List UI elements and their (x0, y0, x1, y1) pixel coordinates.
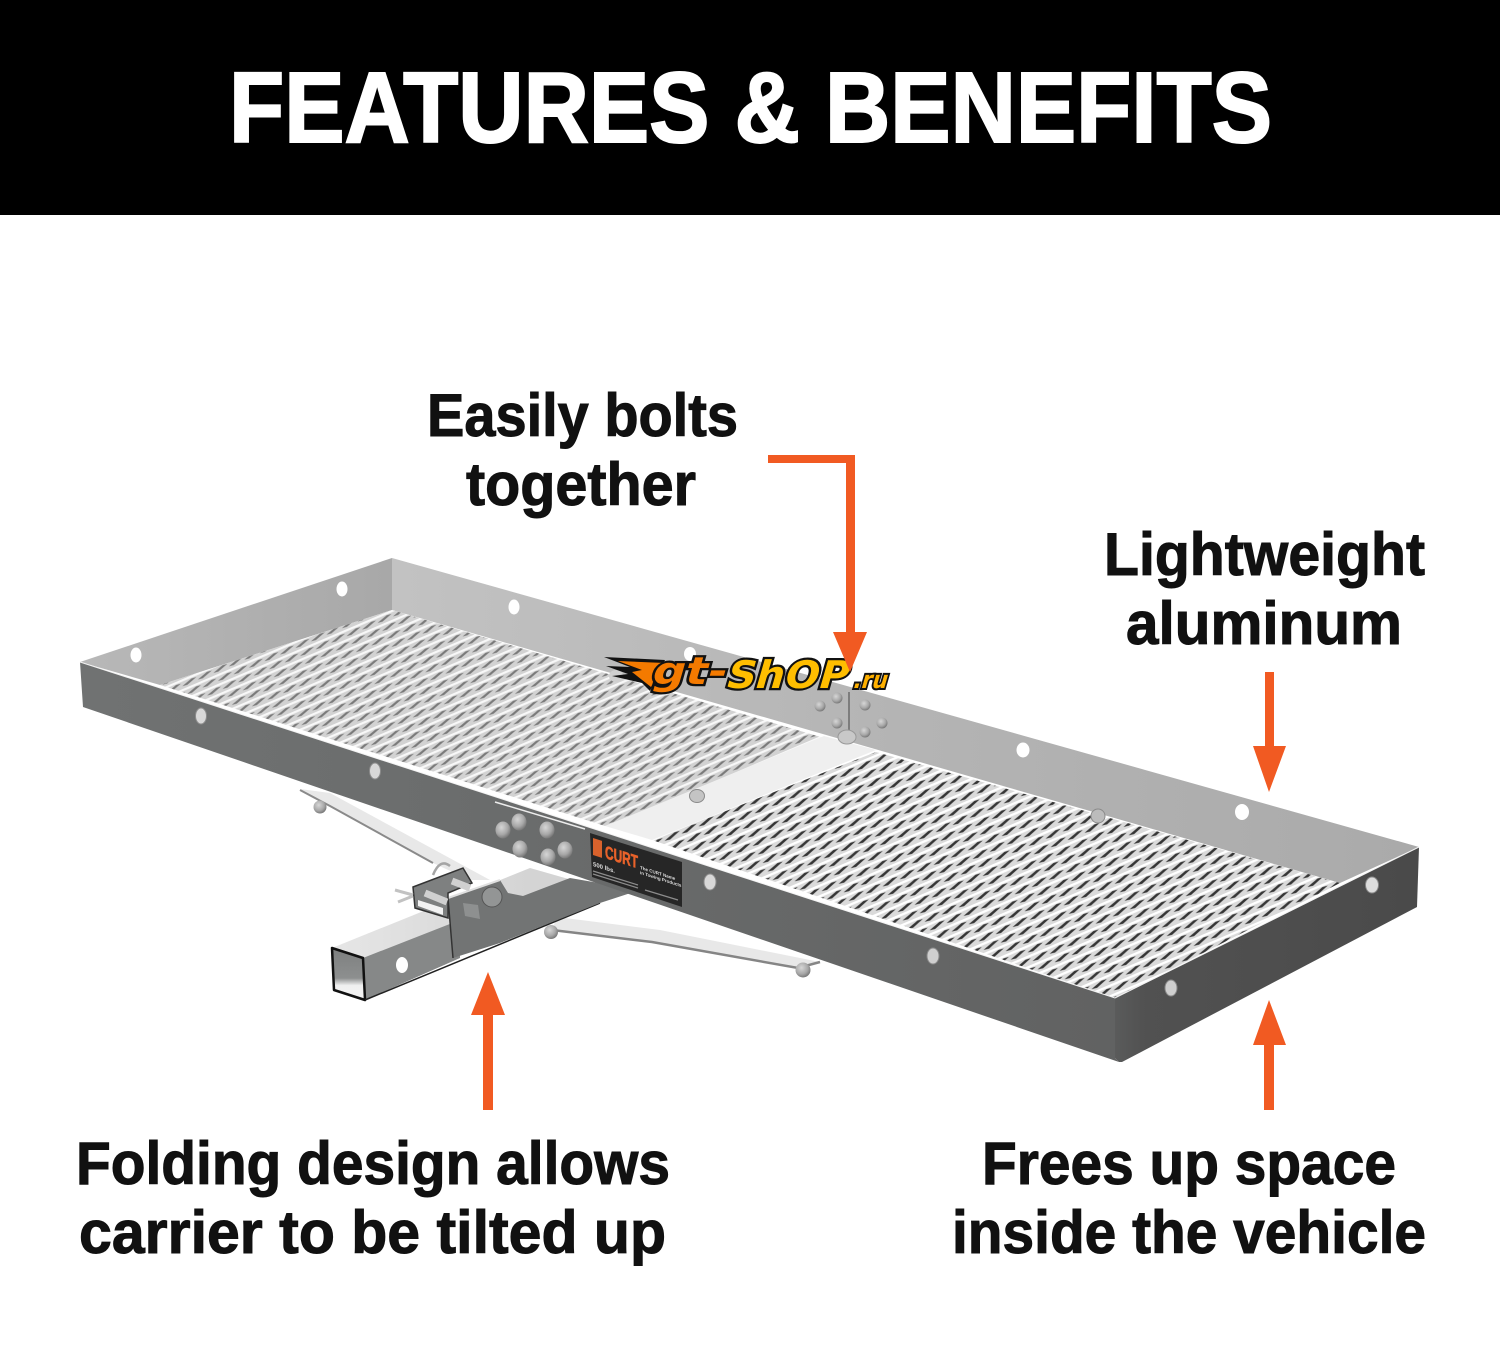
centre cross bar (605, 736, 876, 840)
lower folding strut (544, 917, 820, 978)
flame streaks (604, 657, 665, 691)
pivot plate (448, 878, 640, 958)
callout: frees up space: inside the vehicle (952, 1199, 1426, 1266)
floor bolts (609, 670, 1105, 823)
callout: frees up space: Frees up space (982, 1130, 1396, 1197)
CURT product label: CURT (605, 841, 638, 872)
arrow: frees up space (1253, 1000, 1286, 1110)
CURT product label: in Towing Products (640, 870, 682, 888)
watermark logo: ShOP (721, 654, 856, 698)
tray front outer wall (80, 662, 1119, 1062)
right expanded-metal floor (652, 752, 1340, 998)
bridge bolts on back wall (814, 692, 888, 744)
arrow: folding design (471, 972, 505, 1110)
upper folding strut (300, 789, 490, 880)
callout: easily bolts together: Easily bolts (427, 382, 738, 449)
tray back inner wall (392, 558, 1419, 883)
watermark logo: .ru (850, 665, 892, 694)
callout: frees up space (952, 1130, 1426, 1266)
logo text: gt- (647, 650, 734, 694)
CURT product label: The CURT Name (640, 865, 676, 881)
header banner (0, 0, 1500, 215)
tray right outer wall (1115, 847, 1419, 1062)
callout: folding design: carrier to be tilted up (79, 1199, 666, 1266)
hitch pin bracket (395, 863, 472, 918)
arrow: lightweight aluminum (1253, 672, 1286, 792)
watermark logo (604, 650, 892, 698)
front wall bolts (496, 814, 572, 866)
callout: folding design: Folding design allows (76, 1130, 670, 1197)
title: FEATURES & BENEFITS (229, 52, 1272, 164)
wall holes (130, 582, 1378, 996)
callout: easily bolts together: together (466, 451, 696, 518)
callout: lightweight aluminum (1104, 521, 1425, 657)
left expanded-metal floor (160, 610, 824, 826)
hitch cargo carrier illustration (80, 558, 1419, 1062)
tray left inner wall (80, 558, 392, 685)
callout: folding design (76, 1130, 670, 1266)
arrow: easily bolts together (768, 455, 867, 672)
CURT product label: 500 lbs. (593, 861, 615, 875)
callout: easily bolts together (427, 382, 738, 518)
CURT product label (590, 833, 682, 907)
receiver tube (332, 868, 600, 1000)
callout: lightweight aluminum: Lightweight (1104, 521, 1425, 588)
callout: lightweight aluminum: aluminum (1126, 590, 1402, 657)
